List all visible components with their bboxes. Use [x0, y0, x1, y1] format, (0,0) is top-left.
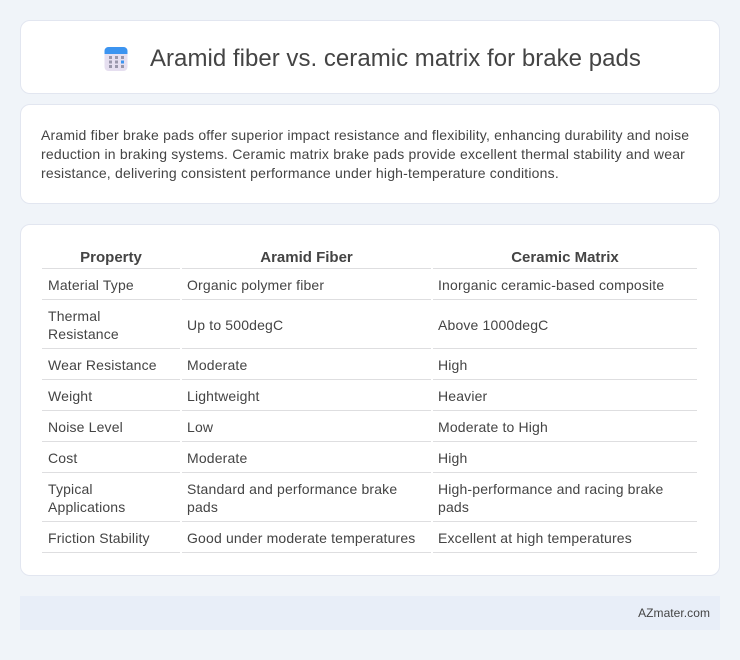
row: wear resistance: Moderate — [187, 357, 247, 373]
row: typical applications: Applications — [48, 499, 125, 515]
row: typical applications — [48, 481, 664, 515]
summary text: resistance, delivering consistent performance under high-temperature conditions. — [41, 165, 559, 181]
row: weight: Heavier — [438, 388, 487, 404]
row: cost: Cost — [48, 450, 77, 466]
row: material type: Organic polymer fiber — [187, 277, 324, 293]
row: thermal resistance: Resistance — [48, 326, 119, 342]
row: cost: Moderate — [187, 450, 247, 466]
table header: Ceramic Matrix — [511, 249, 619, 266]
footer bar — [20, 596, 720, 630]
row: thermal resistance: Up to 500degC — [187, 317, 283, 333]
row: material type: Inorganic ceramic-based composite — [438, 277, 664, 293]
summary text: reduction in braking systems. Ceramic matrix brake pads provide excellent thermal stability and wear — [41, 146, 685, 162]
row: typical applications: pads — [438, 499, 469, 515]
table header: Property — [80, 249, 142, 266]
row: friction stability — [48, 530, 632, 546]
row: weight: Weight — [48, 388, 92, 404]
row: weight — [48, 388, 487, 404]
row: noise level: Noise Level — [48, 419, 123, 435]
row: thermal resistance — [48, 308, 548, 342]
title: Aramid fiber vs. ceramic matrix for brake pads — [150, 45, 641, 72]
row: friction stability: Good under moderate temperatures — [187, 530, 415, 546]
row: thermal resistance: Thermal — [48, 308, 100, 324]
footer credit: AZmater.com — [638, 606, 710, 620]
summary text — [41, 127, 689, 181]
panel: summary — [20, 104, 720, 204]
row: weight: Lightweight — [187, 388, 260, 404]
row: typical applications: Typical — [48, 481, 93, 497]
table header: Aramid Fiber — [260, 249, 353, 266]
row: typical applications: pads — [187, 499, 218, 515]
row: wear resistance: High — [438, 357, 467, 373]
row: cost: High — [438, 450, 467, 466]
row: typical applications: Standard and performance brake — [187, 481, 397, 497]
row: wear resistance: Wear Resistance — [48, 357, 157, 373]
icon: calendar — [104, 47, 128, 71]
row: material type — [48, 277, 664, 293]
row: cost — [48, 450, 467, 466]
table header — [80, 249, 619, 266]
row: typical applications: High-performance and racing brake — [438, 481, 664, 497]
panel: title card — [20, 20, 720, 94]
row: noise level: Low — [187, 419, 213, 435]
row: thermal resistance: Above 1000degC — [438, 317, 548, 333]
row: friction stability: Friction Stability — [48, 530, 150, 546]
panel: comparison table — [20, 224, 720, 576]
row: noise level: Moderate to High — [438, 419, 548, 435]
row: wear resistance — [48, 357, 467, 373]
summary text: Aramid fiber brake pads offer superior impact resistance and flexibility, enhancing durability and noise — [41, 127, 689, 143]
row: material type: Material Type — [48, 277, 134, 293]
row: noise level — [48, 419, 548, 435]
row: friction stability: Excellent at high temperatures — [438, 530, 632, 546]
